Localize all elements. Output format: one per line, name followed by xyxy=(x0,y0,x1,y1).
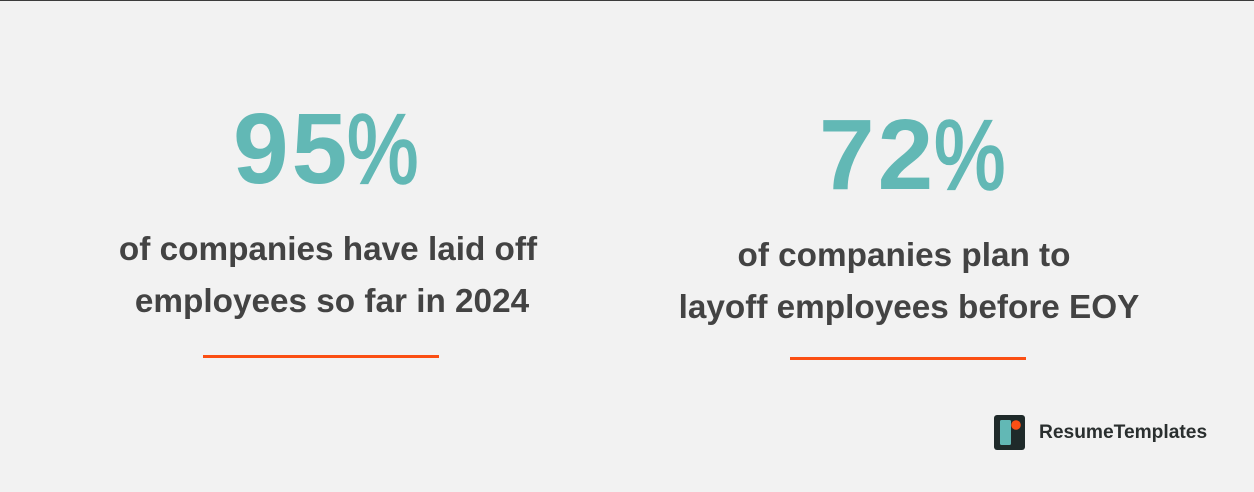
text: brand name: ResumeTemplates xyxy=(1039,422,1207,443)
text: laid off so far xyxy=(119,231,538,320)
stat: 72% xyxy=(819,99,1005,211)
text: plan to layoff: of companies plan to xyxy=(737,237,1070,274)
stat: 72%: 72 xyxy=(819,99,936,211)
divider: right underline xyxy=(790,357,1026,360)
icon: logo mark xyxy=(994,415,1025,450)
text: laid off so far: employees so far in 2024 xyxy=(135,283,529,320)
stat: 95%: 95 xyxy=(233,93,350,205)
stat: 95%: % xyxy=(347,94,418,204)
stat: 72%: % xyxy=(934,100,1005,210)
divider: left underline xyxy=(203,355,439,358)
text: plan to layoff xyxy=(679,237,1139,326)
stat: 95% xyxy=(233,93,418,205)
logo: ResumeTemplates xyxy=(994,415,1207,450)
text: plan to layoff: layoff employees before EOY xyxy=(679,289,1139,326)
text: laid off so far: of companies have laid off xyxy=(119,231,537,268)
